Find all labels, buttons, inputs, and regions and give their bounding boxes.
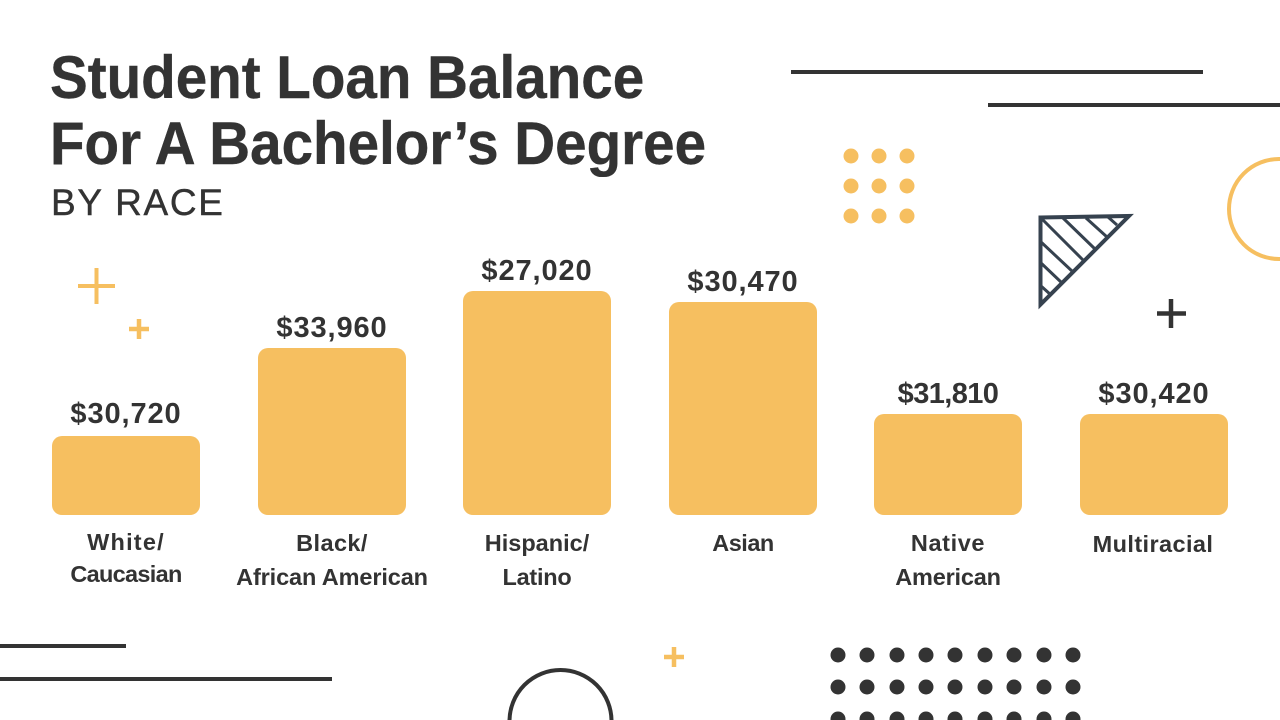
bar: Native American: American xyxy=(895,564,1001,590)
icon: yellow plus bottom xyxy=(664,647,684,667)
icon: hatched triangle xyxy=(1040,216,1129,304)
top lines xyxy=(791,72,1280,105)
bar: Native American xyxy=(874,378,1022,590)
bar: Multiracial: Multiracial xyxy=(1093,531,1213,557)
bar: White/Caucasian: White/ xyxy=(87,529,165,555)
icon: dark dot grid xyxy=(830,648,1080,720)
bar: Black/African American: African American xyxy=(236,564,428,590)
bar: Native American: $31,810 xyxy=(898,378,998,410)
bar: Asian: Asian xyxy=(712,530,774,556)
bar: Multiracial: $30,420 xyxy=(1098,378,1210,410)
bar: Hispanic/Latino xyxy=(463,255,611,590)
bar: White/Caucasian: Caucasian xyxy=(70,561,182,587)
bottom lines xyxy=(0,646,332,679)
icon: dark plus xyxy=(1157,299,1186,328)
bar: Hispanic/Latino: Hispanic/ xyxy=(485,530,589,556)
bar: Asian: $30,470 xyxy=(687,266,799,298)
bar: Black/African American: $33,960 xyxy=(276,312,388,344)
title: For A Bachelor’s Degree xyxy=(50,110,706,177)
bar: Hispanic/Latino: Latino xyxy=(502,564,572,590)
title: Student Loan Balance xyxy=(50,44,644,111)
bar: Hispanic/Latino: $27,020 xyxy=(481,255,593,287)
bar: White/Caucasian: $30,720 xyxy=(70,398,182,430)
icon: yellow dot grid xyxy=(844,148,914,224)
icon: dark circle xyxy=(510,670,612,720)
title xyxy=(50,44,706,177)
bar: White/Caucasian xyxy=(52,398,200,587)
bar: Native American: Native xyxy=(911,530,985,556)
icon: yellow circle xyxy=(1229,159,1280,259)
bar: Black/African American xyxy=(236,312,428,590)
icon: yellow plus small xyxy=(129,319,149,339)
bar: Asian xyxy=(669,266,817,556)
bar chart xyxy=(52,255,1228,590)
subtitle: BY RACE xyxy=(51,182,225,223)
icon: yellow plus large xyxy=(78,268,115,304)
bar: Black/African American: Black/ xyxy=(296,530,368,556)
bar: Multiracial xyxy=(1080,378,1228,557)
